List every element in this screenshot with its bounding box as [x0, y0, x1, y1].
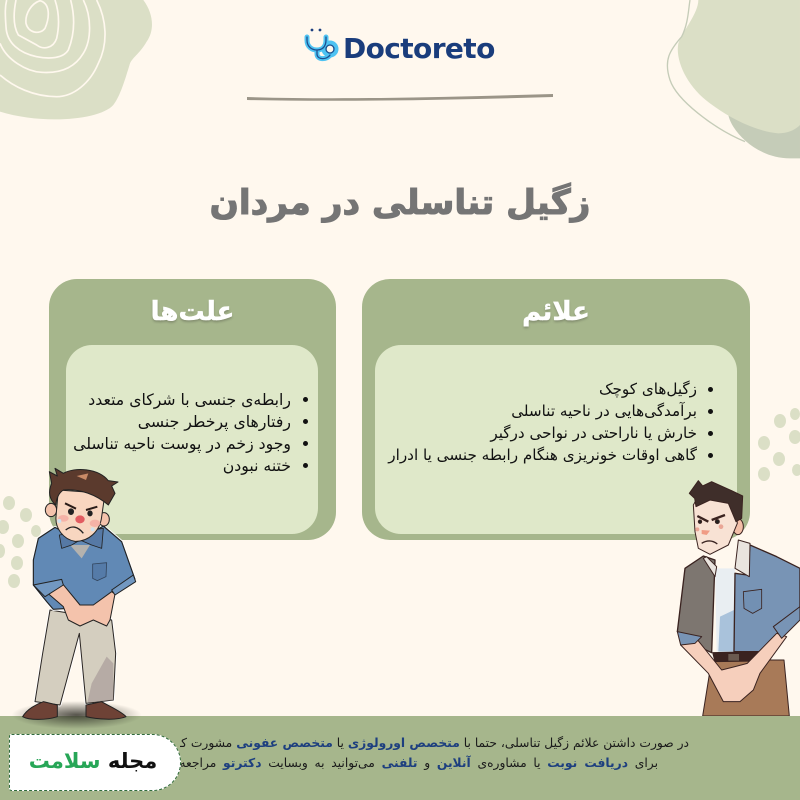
hair — [49, 468, 118, 505]
logo — [304, 28, 495, 65]
face — [56, 490, 105, 541]
belt — [713, 652, 762, 662]
shirt right side — [734, 545, 800, 652]
trousers — [35, 610, 116, 705]
panel: symptoms — [362, 279, 750, 540]
trousers — [703, 660, 789, 716]
symptom list: برآمدگی‌هایی در ناحیه تناسلی — [511, 402, 697, 420]
bottom note — [180, 736, 689, 770]
blob: top right — [667, 0, 800, 158]
forearms and hands — [44, 583, 115, 626]
panel: causes — [49, 279, 336, 540]
shoes — [23, 702, 57, 719]
face — [693, 493, 737, 554]
cause list: رفتارهای پرخطر جنسی — [138, 412, 291, 431]
undershirt — [715, 568, 735, 652]
forearms and hands — [681, 633, 787, 702]
ear — [733, 519, 743, 535]
title: زگیل تناسلی در مردان — [210, 183, 590, 223]
bottom band — [0, 716, 800, 800]
dots: left side — [0, 496, 41, 588]
symptom list: زگیل‌های کوچک — [599, 380, 697, 398]
inner card: symptoms — [375, 345, 737, 534]
icon: stethoscope — [304, 28, 338, 62]
cause list: ختنه نبودن — [223, 456, 291, 475]
character: right man — [676, 480, 800, 716]
badge: health magazine — [9, 734, 181, 791]
face details — [719, 524, 723, 529]
character: left man — [15, 468, 138, 728]
badge: health magazine: مجله سلامت — [29, 749, 157, 773]
cause list: رابطه‌ی جنسی با شرکای متعدد — [88, 390, 291, 409]
symptom list — [388, 380, 713, 464]
shirt — [33, 526, 135, 609]
inner card: causes — [66, 345, 318, 534]
shirt left side — [677, 556, 715, 653]
shadow — [12, 701, 142, 729]
cause list — [73, 390, 308, 475]
blob: top left with contour lines — [0, 0, 152, 119]
dots: right side — [758, 408, 800, 481]
heading: symptoms: علائم — [522, 297, 590, 327]
symptom list: خارش یا ناراحتی در نواحی درگیر — [490, 424, 697, 442]
collar — [703, 540, 750, 577]
logo wordmark: Doctoreto — [343, 32, 495, 65]
symptom list: گاهی اوقات خونریزی هنگام رابطه جنسی یا ادرار — [388, 446, 697, 464]
ears — [45, 503, 57, 517]
heading: causes: علت‌ها — [151, 297, 234, 327]
hair — [689, 481, 743, 522]
face details — [58, 515, 69, 522]
cause list: وجود زخم در پوست ناحیه تناسلی — [73, 434, 291, 453]
divider under logo — [247, 94, 553, 101]
